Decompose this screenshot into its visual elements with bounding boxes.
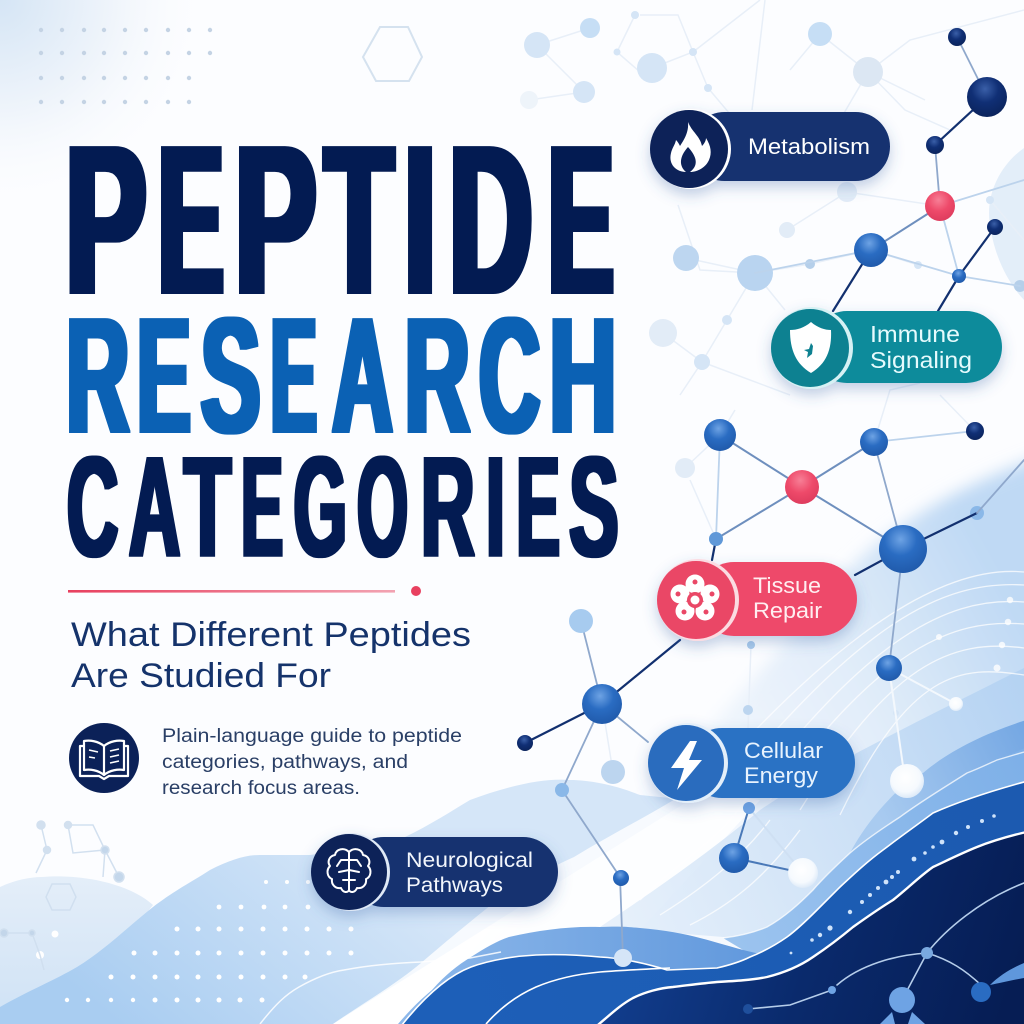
title: A [129,428,180,587]
title: E [271,284,317,467]
title: D [449,101,532,338]
title: R [421,428,475,587]
title: P [235,101,316,338]
divider line with dot [68,586,421,596]
icon: open book [69,723,139,793]
title: R [66,284,129,467]
title: E [241,428,283,587]
label: Cellular Energy: Energy [744,763,818,788]
title [65,101,619,587]
title: E [516,428,560,587]
icon: lightning bolt [671,741,702,790]
title: I [405,101,436,338]
icon: tissue cell flower [670,574,720,620]
panel: Tissue Repair [657,559,857,641]
decorative dot grid top left [39,28,212,104]
subtitle: What Different Peptides [71,616,471,654]
label: Tissue Repair: Tissue [753,573,821,598]
icon: shield [790,322,831,373]
pale background molecular network [520,0,1024,784]
panel: Metabolism [650,109,890,189]
title: S [569,428,619,587]
faded molecule bottom left [0,821,124,970]
subtitle: Are Studied For [71,657,331,695]
label: Immune Signaling: Immune [870,321,960,347]
subtitle [71,616,471,695]
panel: Neurological Pathways [311,833,558,911]
molecular network bonds [525,37,1024,1009]
text: E [548,101,613,338]
label: Neurological Pathways: Pathways [406,874,503,897]
title: H [549,284,617,467]
title: A [332,284,392,467]
description text [162,726,462,799]
label: Metabolism: Metabolism [748,134,870,159]
title: I [486,428,505,587]
description text: research focus areas. [162,778,360,799]
title: O [357,428,408,587]
title: E [158,101,223,338]
title: P [65,101,146,338]
label: Cellular Energy: Cellular [744,738,823,763]
flowing line nodes [936,597,1013,672]
title: R [404,284,470,467]
title: T [184,428,231,587]
description text: categories, pathways, and [162,752,408,773]
description text: Plain-language guide to peptide [162,726,462,747]
title: T [325,101,393,338]
label: Tissue Repair: Repair [753,598,822,623]
flowing white lines [640,571,1024,925]
title: C [479,284,540,467]
title: C [67,428,118,587]
title: E [137,284,191,467]
decorative hexagon [363,27,422,81]
icon: flame [670,122,711,172]
panel: Cellular Energy [648,723,855,803]
dot field bottom left [36,880,354,1002]
label: Immune Signaling: Signaling [870,347,972,373]
title: G [294,428,347,587]
title: S [201,284,260,467]
molecular network spheres [517,28,1024,1024]
panel: Immune Signaling [771,307,1002,389]
label: Neurological Pathways: Neurological [406,849,533,872]
wave dotted trail [790,814,996,954]
icon: brain [328,849,370,892]
